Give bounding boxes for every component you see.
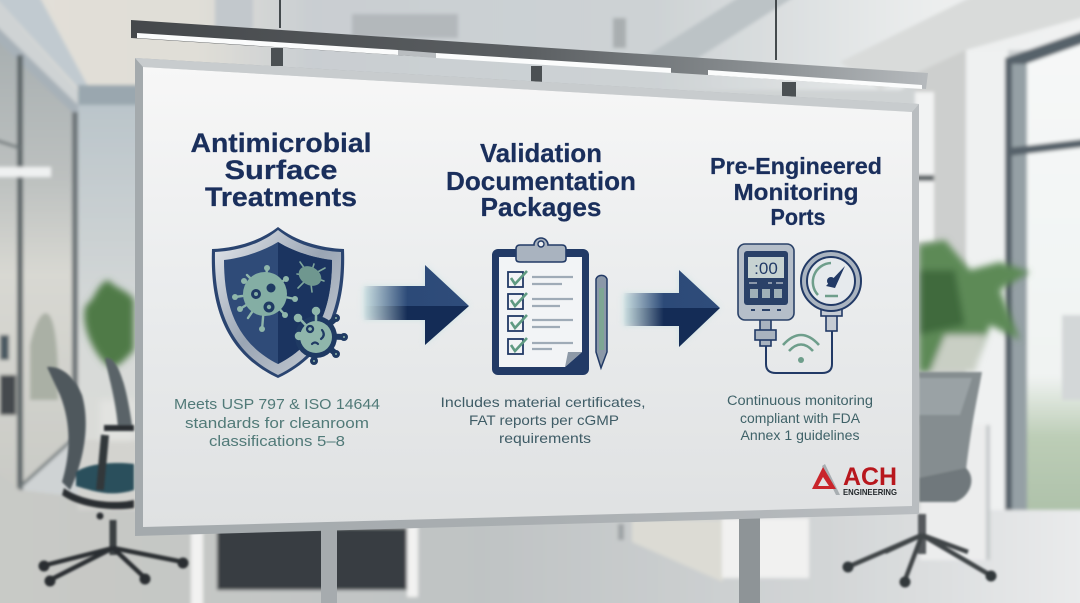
logo: ACH Engineering: ENGINEERING	[843, 487, 897, 497]
right wall and window	[915, 45, 967, 525]
left office chairs	[38, 358, 188, 586]
panel: validation documentation packages	[440, 138, 646, 446]
ceiling	[0, 0, 1080, 90]
panel: pre-engineered monitoring ports: Monitoring	[734, 179, 858, 205]
panel: antimicrobial surface treatments	[174, 128, 380, 450]
panel: pre-engineered monitoring ports: compliant with FDA	[740, 411, 860, 426]
back wall left	[78, 85, 140, 485]
panel: validation documentation packages: requirements	[499, 430, 591, 446]
side window	[915, 92, 934, 242]
right plant	[919, 240, 1030, 372]
icon: shield with microbes	[212, 227, 346, 378]
right office chair	[842, 372, 996, 588]
caption: Continuous monitoring	[727, 393, 873, 408]
panel: antimicrobial surface treatments: Surface	[224, 155, 338, 185]
panel: antimicrobial surface treatments: Treatments	[205, 182, 357, 212]
checklist rows	[508, 272, 523, 354]
icon: clipboard checklist	[492, 238, 607, 375]
storage cabinets	[217, 528, 407, 590]
light bar	[131, 20, 928, 89]
arrow 2	[623, 270, 720, 347]
large microbe	[232, 265, 298, 332]
icon: wifi	[783, 335, 819, 363]
heading: pre-engineered: Pre-Engineered	[710, 153, 882, 179]
arrow 1	[363, 265, 469, 345]
panel: validation documentation packages: Documentation	[446, 166, 636, 196]
heading: validation: Validation	[480, 138, 602, 168]
logo: ACH Engineering	[812, 463, 897, 497]
caption: Includes material certificates,	[440, 394, 646, 410]
panel: validation documentation packages: Packages	[480, 192, 602, 222]
panel: validation documentation packages: FAT reports per cGMP	[469, 412, 619, 428]
panel: pre-engineered monitoring ports: Ports	[770, 204, 826, 230]
panel: pre-engineered monitoring ports	[710, 153, 882, 443]
floor	[0, 450, 1080, 603]
panel: antimicrobial surface treatments: standards for cleanroom	[185, 415, 369, 432]
heading: antimicrobial: Antimicrobial	[190, 128, 372, 158]
pencil	[596, 275, 607, 368]
icon: digital monitor and pressure gauge	[738, 244, 861, 373]
panel: antimicrobial surface treatments: classifications 5–8	[209, 433, 345, 450]
glass wall	[0, 5, 78, 495]
icon: digital monitor and pressure gauge: :00	[754, 259, 778, 278]
panel: pre-engineered monitoring ports: Annex 1 guidelines	[740, 428, 860, 443]
board legs and hanging cables	[271, 0, 796, 603]
board	[135, 58, 919, 536]
outer microbe	[298, 316, 346, 364]
left plant	[84, 280, 134, 440]
caption: Meets USP 797 & ISO 14644	[174, 396, 380, 413]
logo: ACH Engineering: ACH	[843, 463, 897, 491]
small microbe	[295, 262, 325, 292]
